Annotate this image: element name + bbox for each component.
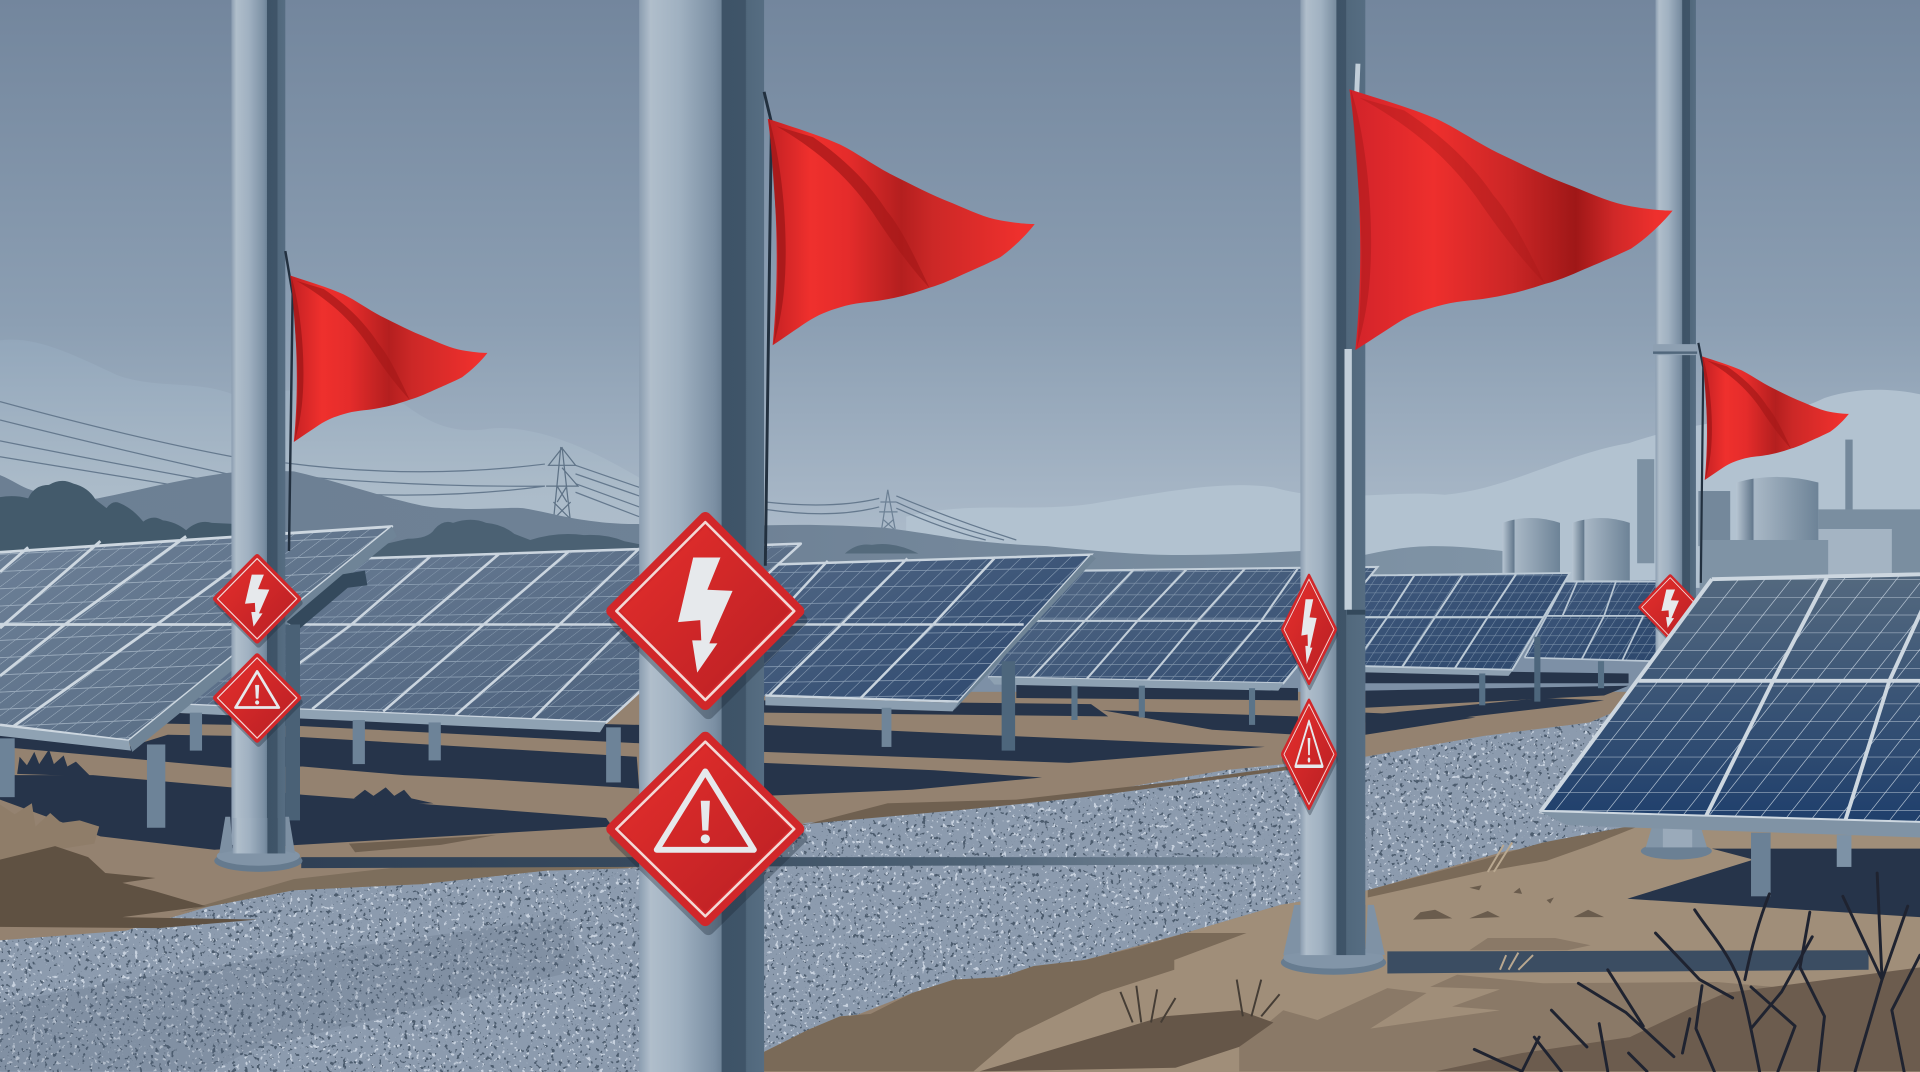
sign 7 bolt bbox=[1640, 576, 1701, 641]
flag 2 bbox=[764, 92, 1035, 566]
pole cast shadow bbox=[301, 857, 1261, 868]
far hills left bbox=[0, 340, 649, 588]
tyre tracks bbox=[0, 917, 580, 1071]
dry brush left light bbox=[0, 803, 99, 862]
dirt dark band near road bbox=[753, 933, 1247, 1071]
solar array E bbox=[1353, 573, 1570, 705]
sign 6 warning bbox=[1283, 702, 1336, 812]
legs bbox=[0, 738, 15, 797]
trees left bbox=[0, 481, 239, 588]
legs bbox=[882, 708, 891, 747]
trees middle bbox=[355, 520, 643, 588]
dry brush foreground bbox=[1474, 873, 1920, 1071]
trees distant bbox=[845, 544, 918, 553]
dry brush left dark bbox=[0, 846, 257, 928]
legs bbox=[190, 713, 202, 751]
brown patch left bbox=[349, 835, 496, 852]
road edge strip right bbox=[1368, 823, 1647, 898]
sign 1 bolt bbox=[216, 557, 300, 645]
tank 1 bbox=[1502, 518, 1560, 576]
big tank bbox=[1736, 477, 1818, 545]
sign 5 bolt bbox=[1283, 577, 1336, 687]
ground base bbox=[0, 692, 1920, 1072]
far hills right bbox=[906, 390, 1920, 588]
flag 1 bbox=[285, 251, 487, 551]
factory bbox=[1502, 440, 1920, 595]
flag 4 bbox=[1698, 343, 1849, 583]
pole 4 bbox=[1641, 0, 1712, 860]
pole 2 bbox=[639, 0, 764, 1072]
pale grass tuft bbox=[1488, 842, 1533, 970]
pole shadow on dirt bbox=[1387, 950, 1869, 973]
tank small behind bbox=[1698, 491, 1730, 546]
pylon left bbox=[546, 447, 578, 545]
pole 4 base bbox=[1641, 842, 1712, 860]
flag 3 bbox=[1349, 64, 1673, 350]
sign 2 warning bbox=[216, 656, 300, 744]
strut bbox=[287, 571, 367, 629]
solar array F far right bbox=[1524, 580, 1656, 688]
road edge strip bbox=[784, 765, 1296, 830]
dirt dark lower middle bbox=[980, 1010, 1273, 1071]
sign 3 bolt bbox=[612, 518, 801, 713]
dirt darker tan right bbox=[1239, 975, 1773, 1071]
legs bbox=[1071, 686, 1078, 720]
mid hills bbox=[0, 471, 1518, 637]
legs bbox=[1751, 833, 1771, 896]
pylon right bbox=[879, 490, 898, 529]
chimney left bbox=[1637, 459, 1654, 563]
solar array D bbox=[988, 567, 1378, 725]
dark grass tufts bbox=[17, 749, 433, 806]
rocks bbox=[1413, 885, 1604, 950]
chimney right bbox=[1845, 440, 1853, 513]
pole 1 base bbox=[214, 850, 302, 872]
pole 1 bbox=[214, 0, 302, 872]
sign 4 warning bbox=[612, 738, 801, 929]
power lines bbox=[0, 402, 1016, 540]
ground shadows bbox=[0, 670, 1629, 850]
solar array C bbox=[735, 555, 1096, 751]
solar array B bbox=[169, 544, 801, 782]
legs bbox=[1598, 661, 1604, 688]
front solar array G bbox=[1540, 574, 1920, 896]
solar array A bbox=[0, 527, 397, 828]
pole 3 bbox=[1281, 0, 1386, 975]
shadow under front panel bbox=[1627, 849, 1920, 917]
main building bbox=[1700, 540, 1828, 589]
rear block bbox=[1818, 509, 1920, 595]
pole 3 base bbox=[1281, 950, 1386, 975]
sky bbox=[0, 0, 1920, 588]
front dirt bbox=[747, 823, 1920, 1072]
dirt darkest bbox=[1435, 967, 1920, 1071]
legs bbox=[1479, 673, 1485, 705]
dry grass tufts front bbox=[1120, 980, 1280, 1022]
gravel road bbox=[0, 698, 1647, 1072]
tank 2 bbox=[1572, 518, 1630, 580]
